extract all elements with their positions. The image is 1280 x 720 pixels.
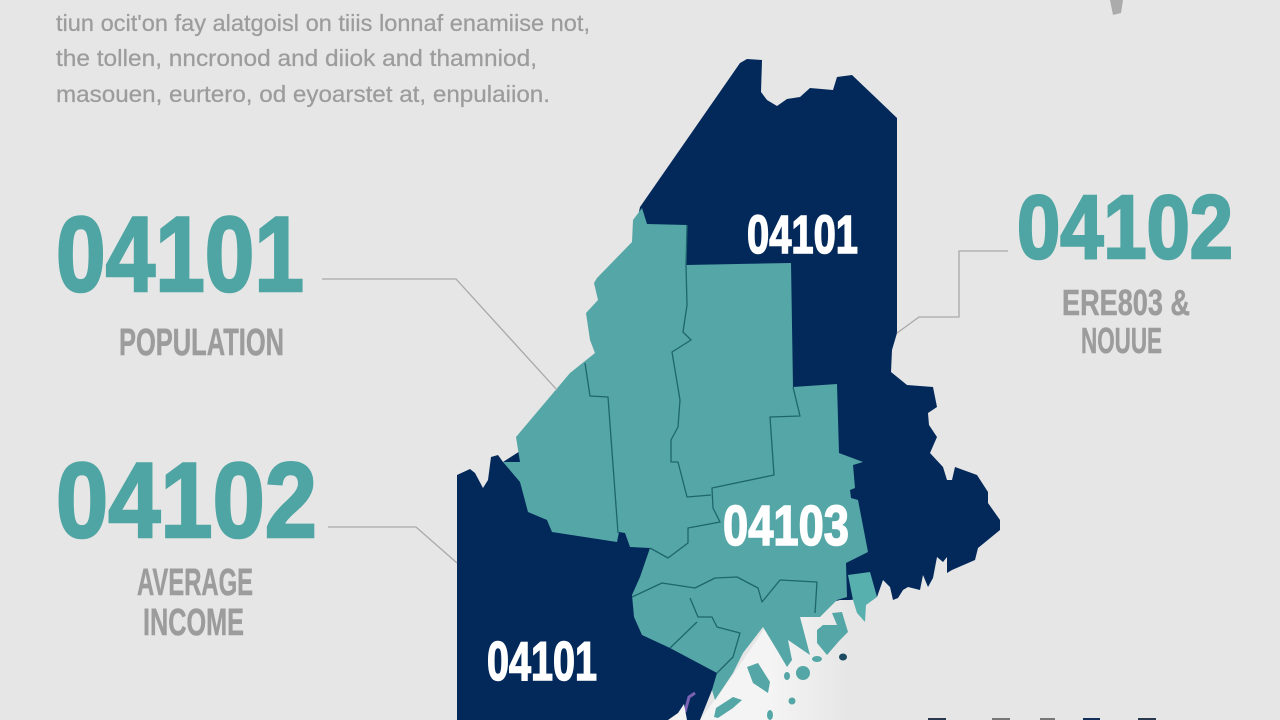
intro text block: the tollen, nncronod and diiok and thamniod, (56, 45, 537, 71)
label: population: POPULATION (119, 322, 284, 364)
region: navy ZIP area (457, 59, 1000, 720)
leader line: right callout (897, 251, 1008, 333)
islands (714, 612, 848, 720)
map of ZIP regions (457, 59, 1000, 720)
label: right callout: ERE803 & (1062, 282, 1190, 323)
intro text block: tiun ocit'on fay alatgoisl on tiiis lonnaf enamiise not, (56, 10, 590, 36)
label: average income: INCOME (143, 602, 244, 644)
callout: 04102 right: 04102 (1017, 178, 1233, 278)
region borders (585, 225, 817, 673)
region: small teal inlet (848, 572, 877, 622)
label: average income (137, 562, 253, 644)
callout: 04102 average income (56, 440, 317, 644)
white coastal shards (668, 704, 687, 720)
purple inlet sliver (685, 693, 695, 712)
callout: 04102 right (1017, 178, 1233, 361)
icon: cropped grey marker top right (1110, 0, 1123, 15)
label: average income: AVERAGE (137, 562, 253, 604)
map label: 04101 south: 04101 (487, 630, 597, 692)
leader line: average income (328, 527, 457, 563)
callout: 04101 population (56, 194, 304, 364)
map label: 04101 north: 04101 (747, 205, 858, 265)
map label: 04103: 04103 (723, 494, 849, 558)
callout: 04102 average income: 04102 (56, 440, 317, 560)
intro text block (56, 10, 590, 107)
callout: 04101 population: 04101 (56, 194, 304, 314)
label: right callout: NOUUE (1081, 320, 1162, 361)
intro text block: masouen, eurtero, od eyoarstet at, enpulaiion. (56, 81, 550, 107)
label: right callout (1062, 282, 1190, 361)
region: teal ZIP area (503, 208, 868, 700)
leader line: population (322, 279, 557, 390)
region: light coastal land (700, 600, 860, 720)
cropped number tops at bottom edge (928, 718, 1156, 720)
small dark island (839, 654, 847, 660)
